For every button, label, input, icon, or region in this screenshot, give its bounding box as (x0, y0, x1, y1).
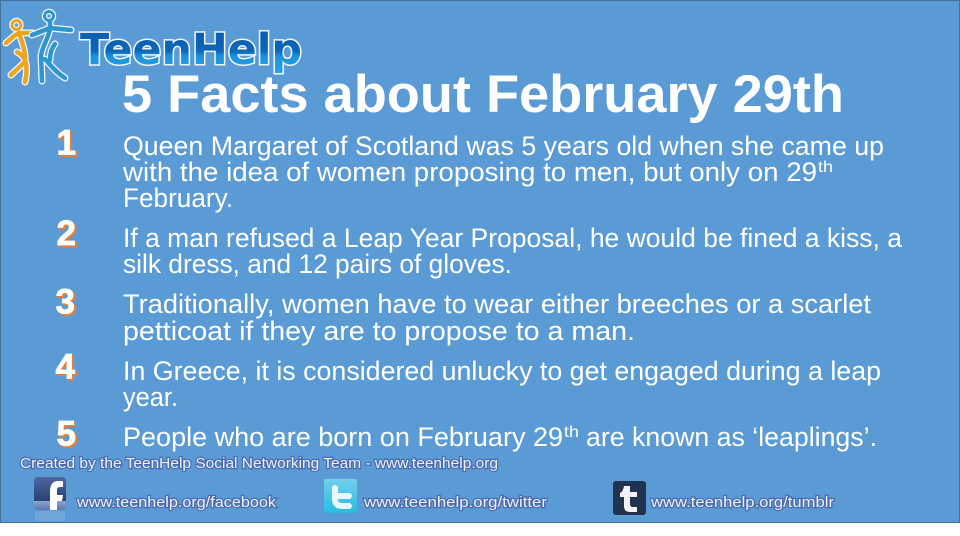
fact 5 text: th (564, 424, 579, 441)
fact 2 (56, 214, 903, 279)
tumblr url: www.teenhelp.org/tumblr (650, 494, 834, 511)
title: 5 Facts about February 29th (122, 65, 844, 124)
credit line: Created by the TeenHelp Social Networking Team - www.teenhelp.org (20, 455, 498, 472)
fact 5 text: are known as ‘leaplings’. (586, 422, 877, 452)
number 4: 4 (57, 349, 77, 388)
fact 3 (56, 282, 871, 346)
fact 5 text (123, 422, 877, 452)
number 1: 1 (56, 124, 76, 162)
fact 1 text: February. (123, 183, 233, 213)
fact 1 text: with the idea of women proposing to men, but only on 29 (122, 157, 817, 187)
number 5: 5 (56, 414, 76, 454)
tumblr link (613, 481, 834, 515)
number 2: 2 (56, 214, 76, 253)
facebook link (34, 477, 277, 521)
fact 4 text: In Greece, it is considered unlucky to get engaged during a leap (123, 356, 881, 386)
fact 4 (56, 348, 881, 412)
icon: facebook (34, 477, 66, 521)
number 4: 4 (56, 348, 76, 386)
twitter link (324, 479, 547, 513)
logo: TeenHelp (6, 12, 302, 82)
fact 4 text (123, 356, 881, 412)
fact 3 text: Traditionally, women have to wear either breeches or a scarlet (123, 289, 871, 319)
fact 3 text: petticoat if they are to propose to a man. (123, 316, 635, 346)
facebook url: www.teenhelp.org/facebook (76, 494, 277, 511)
icon: blue figure (32, 12, 71, 81)
fact 1 text: th (818, 159, 833, 176)
fact 5 text: People who are born on February 29 (123, 422, 563, 452)
logo wordmark: TeenHelp (80, 25, 302, 75)
number 3: 3 (57, 284, 76, 323)
number 5: 5 (58, 416, 77, 455)
number 1: 1 (58, 125, 77, 164)
number 3: 3 (56, 282, 75, 322)
fact 1 text: Queen Margaret of Scotland was 5 years old when she came up (123, 131, 884, 161)
fact 2 text (123, 223, 903, 279)
fact 5 (56, 414, 877, 455)
fact 1 (56, 124, 884, 213)
icon: tumblr (613, 481, 646, 515)
icon: orange figure (6, 20, 33, 82)
fact 4 text: year. (123, 382, 178, 412)
icon: twitter (324, 479, 357, 513)
fact 2 text: If a man refused a Leap Year Proposal, he would be fined a kiss, a (123, 223, 903, 253)
twitter url: www.teenhelp.org/twitter (363, 494, 547, 511)
fact 3 text (123, 289, 871, 346)
fact 2 text: silk dress, and 12 pairs of gloves. (123, 249, 512, 279)
number 2: 2 (58, 216, 77, 254)
fact 1 text (122, 131, 884, 213)
